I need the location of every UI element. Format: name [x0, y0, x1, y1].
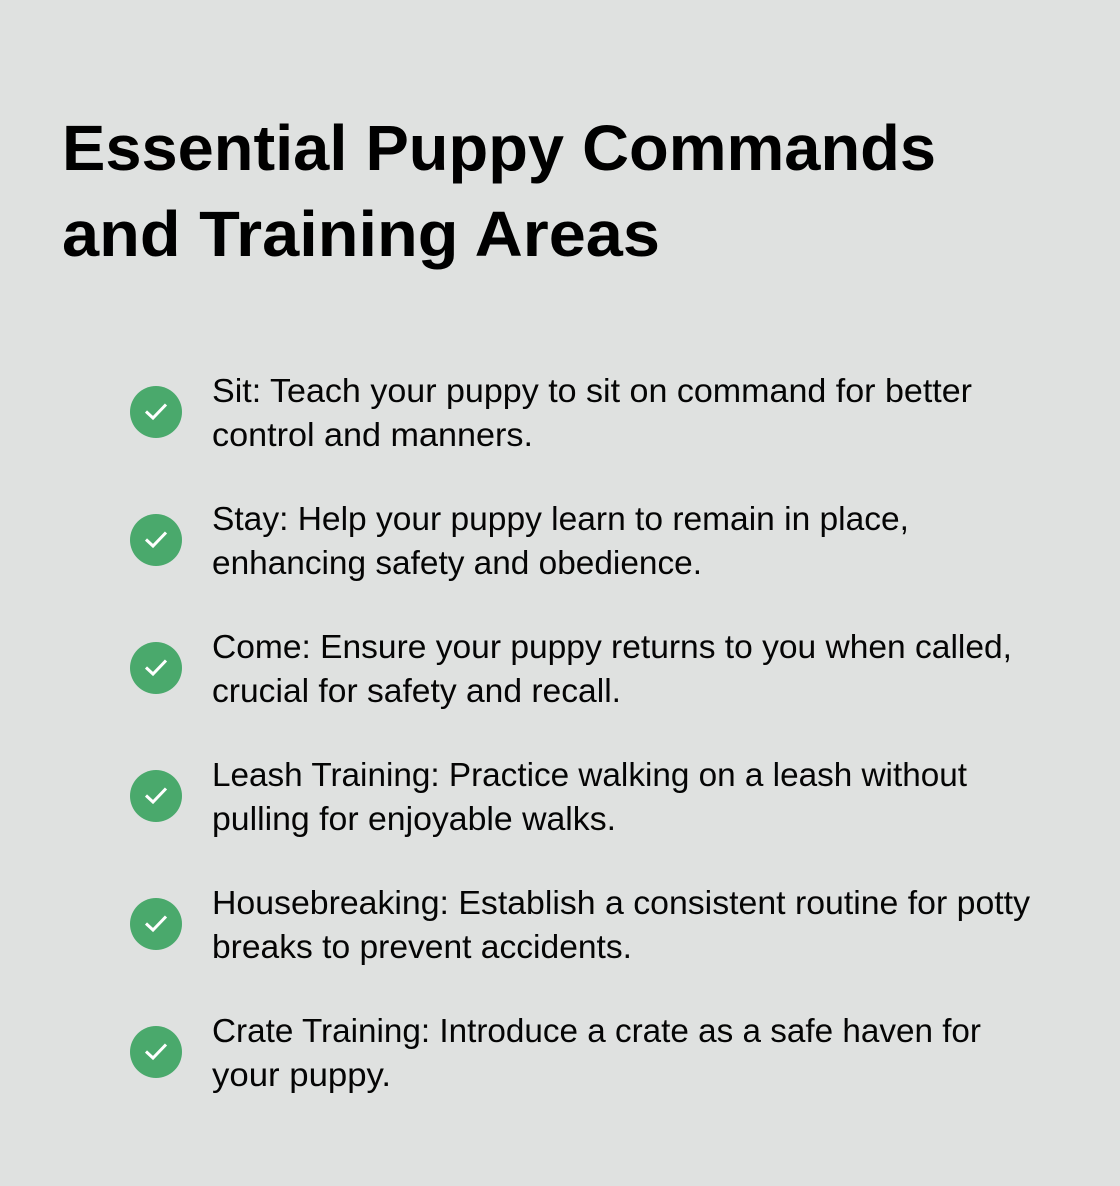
- icon: check mark: [130, 642, 182, 694]
- text: Housebreaking: breaks to prevent accidents.: [212, 928, 632, 965]
- text: Sit: control and manners.: [212, 416, 533, 453]
- list item: Stay: [130, 500, 909, 581]
- text: Stay: Stay: Help your puppy learn to remain in place,: [212, 500, 909, 537]
- text: Leash Training: Leash Training: Practice walking on a leash without: [212, 756, 967, 793]
- text: Come: Come: Ensure your puppy returns to you when called,: [212, 628, 1012, 665]
- icon: check mark: [130, 770, 182, 822]
- text: Stay: enhancing safety and obedience.: [212, 544, 702, 581]
- text: Crate Training: Crate Training: Introduce a crate as a safe haven for: [212, 1012, 981, 1049]
- list item: Crate Training: [130, 1012, 981, 1093]
- icon: check mark: [130, 1026, 182, 1078]
- icon: check mark: [130, 898, 182, 950]
- text: Crate Training: [212, 1012, 981, 1093]
- icon: check mark: [130, 514, 182, 566]
- title: and Training Areas: [62, 198, 660, 270]
- list item: Come: [130, 628, 1012, 709]
- text: Come: crucial for safety and recall.: [212, 672, 621, 709]
- list item: Leash Training: [130, 756, 967, 837]
- title: Essential Puppy Commands: [62, 112, 936, 184]
- icon: check mark: [130, 386, 182, 438]
- text: Come: [212, 628, 1012, 709]
- text: Housebreaking: [212, 884, 1031, 965]
- title: [62, 112, 936, 270]
- text: Leash Training: pulling for enjoyable walks.: [212, 800, 616, 837]
- list item: Sit: [130, 372, 972, 453]
- text: Crate Training: your puppy.: [212, 1056, 391, 1093]
- text: Housebreaking: Housebreaking: Establish a consistent routine for potty: [212, 884, 1031, 921]
- text: Leash Training: [212, 756, 967, 837]
- text: Sit: Sit: Teach your puppy to sit on command for better: [212, 372, 972, 409]
- list item: Housebreaking: [130, 884, 1031, 965]
- text: Stay: [212, 500, 909, 581]
- text: Sit: [212, 372, 972, 453]
